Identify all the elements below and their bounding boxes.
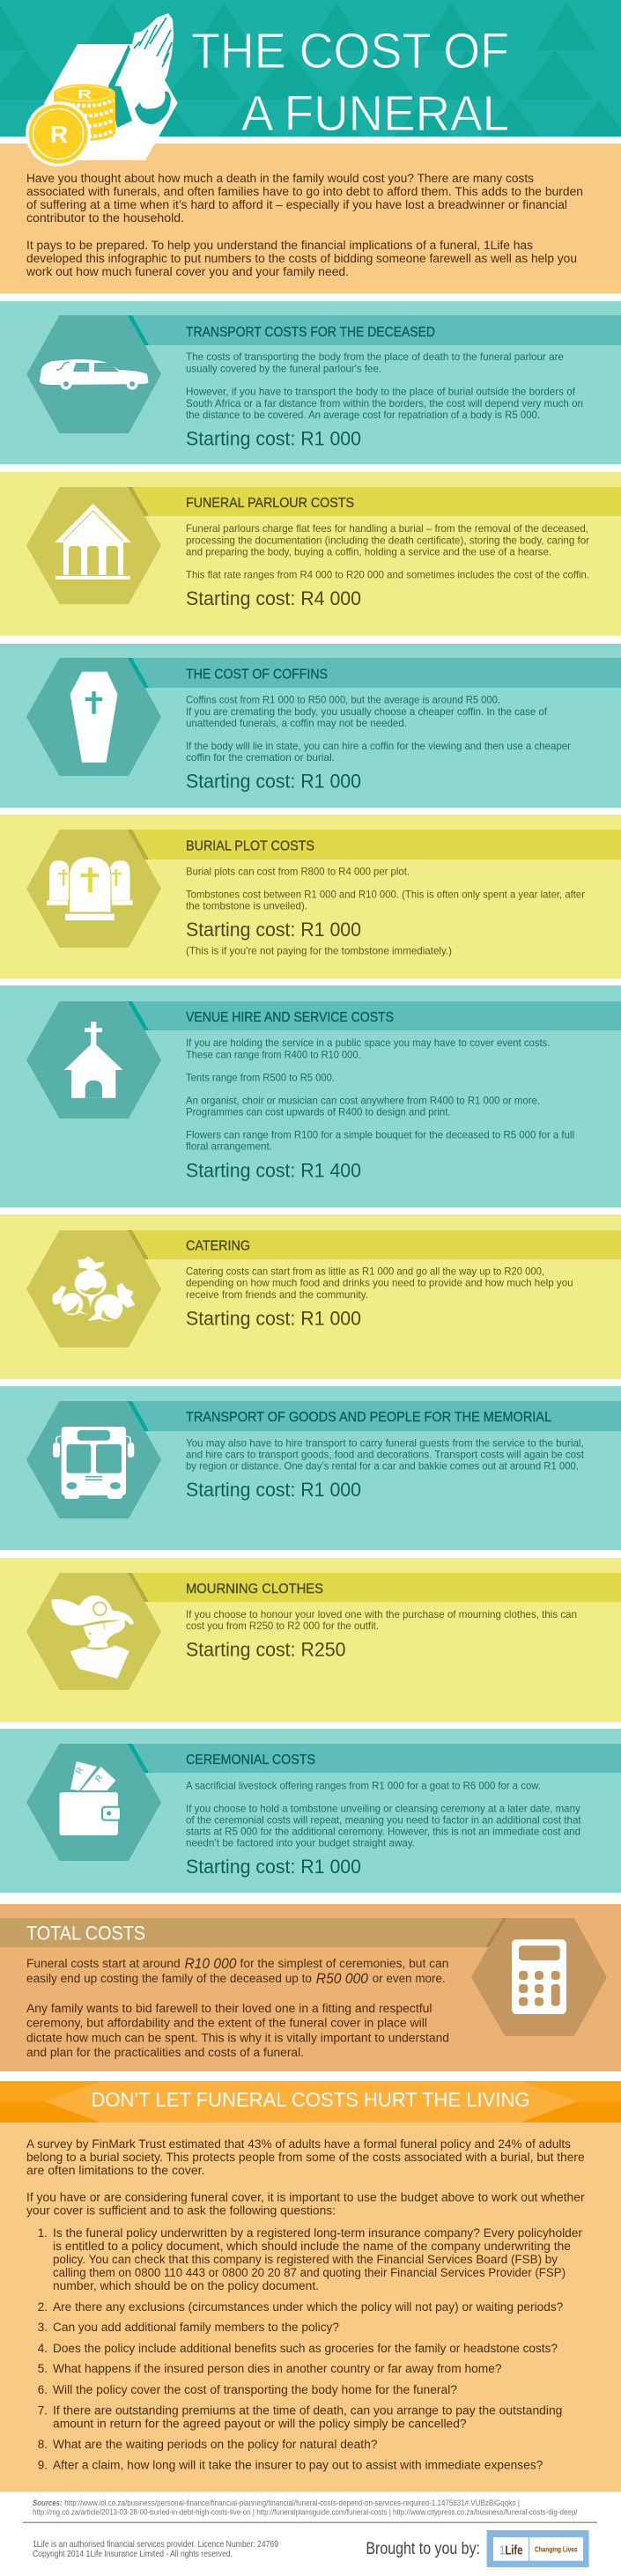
body text: starts at R5 000 for the additional ceremony. However, this is not an immediate cost and xyxy=(186,1826,580,1838)
body text: coffin for the cremation or burial. xyxy=(186,751,335,764)
heading: TRANSPORT OF GOODS AND PEOPLE FOR THE MEMORIAL xyxy=(186,1410,551,1425)
body text: receive from friends and the community. xyxy=(186,1288,368,1301)
body text xyxy=(186,694,571,764)
panel: mourning clothes xyxy=(0,1558,621,1722)
body text: Programmes can cost upwards of R400 to design and print. xyxy=(186,1106,451,1118)
body text: However, if you have to transport the body to the place of burial outside the borders of xyxy=(186,386,576,398)
heading band xyxy=(132,1401,621,1431)
legal notice: 1Life is an authorised financial services provider. Licence Number: 24769 xyxy=(33,2539,278,2550)
numbered question list: Can you add additional family members to the policy? xyxy=(53,2321,339,2334)
heading: MOURNING CLOTHES xyxy=(186,1582,323,1597)
banner: don't let funeral costs hurt the living: DON’T LET FUNERAL COSTS HURT THE LIVING xyxy=(91,2088,530,2111)
numbered question list: 1. xyxy=(38,2226,48,2240)
starting cost: Starting cost: R1 000 xyxy=(186,1856,361,1878)
starting cost: Starting cost: R1 000 xyxy=(186,1308,361,1330)
banner: don't let funeral costs hurt the living xyxy=(0,2081,621,2122)
heading band xyxy=(132,487,621,516)
panel: total costs xyxy=(0,1904,621,2071)
icon: coin stack xyxy=(54,85,115,141)
intro paragraph two: work out how much funeral cover you and your family need. xyxy=(26,265,349,278)
heading band xyxy=(132,315,621,345)
icon: praying hands xyxy=(108,13,174,128)
hexagon xyxy=(26,658,161,776)
icon: tombstones xyxy=(47,857,133,920)
starting cost: Starting cost: R1 000 xyxy=(186,1479,361,1501)
body text: the tombstone is unveiled). xyxy=(186,900,307,912)
numbered question list: 7. xyxy=(38,2404,48,2417)
numbered question list: Is the funeral policy underwritten by a registered long-term insurance company? Every policyholder xyxy=(53,2226,583,2240)
body text xyxy=(186,1266,573,1301)
starting cost: Starting cost: R4 000 xyxy=(186,587,361,609)
icon: wallet with banknotes: R xyxy=(93,1773,106,1784)
icon: praying hands and coins xyxy=(26,13,178,166)
numbered question list: number, which should be on the policy document. xyxy=(53,2279,319,2292)
intro paragraph two: developed this infographic to put numbers to the costs of bidding someone farewell as well as help you xyxy=(26,252,577,265)
total costs paragraph two: dictate how much can be spent. This is why it is vitally important to understand xyxy=(26,2031,449,2045)
total costs paragraph one: Funeral costs start at around xyxy=(26,1957,181,1970)
heading band xyxy=(132,1573,621,1602)
body text: If the body will lie in state, you can hire a coffin for the viewing and then use a cheaper xyxy=(186,740,571,752)
panel: ceremonial costs xyxy=(0,1729,621,1893)
body text xyxy=(186,351,583,421)
body text: floral arrangement. xyxy=(186,1140,272,1153)
numbered question list: is entitled to a policy document, which should include the name of the company underwriting the xyxy=(53,2240,571,2253)
body text: If you are cremating the body, you usually choose a cheaper coffin. In the case of xyxy=(186,705,548,718)
heading: THE COST OF COFFINS xyxy=(186,668,328,682)
body text: An organist, choir or musician can cost anywhere from R400 to R1 000 or more. xyxy=(186,1094,540,1106)
body text: Funeral parlours charge flat fees for handling a burial – from the removal of the deceased, xyxy=(186,522,588,535)
numbered question list: 2. xyxy=(38,2300,48,2314)
body text: processing the documentation (including the death certificate), storing the body, caring for xyxy=(186,534,589,546)
icon: root vegetables xyxy=(52,1257,135,1321)
intro paragraph one: Have you thought about how much a death in the family would cost you? There are many costs xyxy=(26,172,534,185)
budget paragraph: If you have or are considering funeral cover, it is important to use the budget above to work out whether xyxy=(26,2191,585,2203)
numbered question list xyxy=(38,2226,583,2471)
panel: catering xyxy=(0,1214,621,1379)
numbered question list: amount in return for the agreed payout or will the policy simply be cancelled? xyxy=(53,2417,467,2431)
hexagon xyxy=(26,830,161,948)
starting cost: Starting cost: R1 000 xyxy=(186,428,361,450)
panel: the cost of coffins xyxy=(0,644,621,808)
heading: FUNERAL PARLOUR COSTS xyxy=(186,496,354,511)
starting cost: Starting cost: R1 000 xyxy=(186,919,361,941)
hexagon xyxy=(26,487,161,604)
brought to you by: Brought to you by: xyxy=(366,2540,480,2558)
total costs paragraph two: and plan for the practicalities and costs of a funeral. xyxy=(26,2046,304,2059)
total costs paragraph two: ceremony, but affordability and the extent of the funeral cover in place will xyxy=(26,2017,427,2029)
panel: funeral parlour costs xyxy=(0,472,621,636)
body text: The costs of transporting the body from the place of death to the funeral parlour are xyxy=(186,351,564,363)
logo: 1Life: Changing Lives xyxy=(535,2545,578,2554)
survey paragraph: A survey by FinMark Trust estimated that 43% of adults have a formal funeral policy and 24% of adults xyxy=(26,2137,571,2151)
icon: large coin xyxy=(26,101,91,166)
body text: Tombstones cost between R1 000 and R10 000. (This is often only spent a year later, after xyxy=(186,889,585,901)
body text xyxy=(186,1608,577,1632)
numbered question list: 9. xyxy=(38,2459,48,2471)
intro paragraph one: associated with funerals, and often families have to go into debt to afford them. This adds to the burden xyxy=(26,185,583,198)
heading band xyxy=(132,1744,621,1773)
logo: 1Life xyxy=(487,2530,589,2567)
body text: unattended funerals, a coffin may not be needed. xyxy=(186,717,407,729)
body text: Coffins cost from R1 000 to R50 000, but the average is around R5 000. xyxy=(186,694,500,706)
icon: hearse xyxy=(40,359,149,389)
sources xyxy=(33,2498,578,2517)
heading: CATERING xyxy=(186,1238,250,1254)
numbered question list: After a claim, how long will it take the insurer to pay out to assist with immediate expenses? xyxy=(53,2459,543,2471)
heading band xyxy=(132,1230,621,1259)
title: THE COST OF xyxy=(191,23,509,79)
total costs paragraph one: R10 000 xyxy=(185,1955,237,1972)
icon: church xyxy=(64,1022,122,1098)
heading band xyxy=(0,1918,503,1947)
body text xyxy=(186,1037,574,1153)
body text xyxy=(186,1436,585,1473)
heading band xyxy=(132,1001,621,1030)
total costs paragraph one xyxy=(26,1955,448,1987)
hexagon xyxy=(26,1573,161,1690)
starting cost: Starting cost: R250 xyxy=(186,1639,345,1661)
panel: burial plot costs xyxy=(0,815,621,978)
hexagon xyxy=(26,1744,161,1861)
body text: and preparing the body, buying a coffin, holding a service and the use of a hearse. xyxy=(186,545,551,557)
numbered question list: 8. xyxy=(38,2438,48,2451)
sources: http://www.iol.co.za/business/personal-finance/financial-planning/financial/funeral-costs-depend-on-services-required-1.1475631#.VUBzBiGqqko | xyxy=(64,2498,520,2507)
note: (This is if you're not paying for the tombstone immediately.) xyxy=(186,944,452,956)
heading: VENUE HIRE AND SERVICE COSTS xyxy=(186,1010,394,1025)
panel: funeral cover advice xyxy=(0,2122,621,2491)
numbered question list: Are there any exclusions (circumstances under which the policy will not pay) or waiting periods? xyxy=(53,2300,563,2314)
body text xyxy=(186,865,585,912)
body text: If you choose to honour your loved one with the purchase of mourning clothes, this can xyxy=(186,1608,577,1620)
body text: the distance to be covered. An average cost for repatriation of a body is R5 000. xyxy=(186,409,540,421)
numbered question list: Will the policy cover the cost of transporting the body home for the funeral? xyxy=(53,2383,457,2396)
survey paragraph xyxy=(26,2137,585,2177)
starting cost: Starting cost: R1 400 xyxy=(186,1159,361,1181)
hexagon xyxy=(26,1401,161,1518)
heading: TRANSPORT COSTS FOR THE DECEASED xyxy=(186,325,435,340)
title: A FUNERAL xyxy=(241,85,509,142)
panel: venue hire and service costs xyxy=(0,985,621,1207)
starting cost: Starting cost: R1 000 xyxy=(186,771,361,793)
survey paragraph: belong to a burial society. This protects people from some of the costs associated with a burial, but there xyxy=(26,2151,585,2164)
icon: woman in mourning hat xyxy=(51,1595,134,1679)
header banner xyxy=(0,0,621,137)
total costs paragraph two xyxy=(26,2002,449,2059)
intro paragraph one xyxy=(26,172,583,225)
intro paragraph one: of suffering at a time when it’s hard to afford it – especially if you have lost a breadwinner or financial xyxy=(26,198,567,211)
heading band xyxy=(132,830,621,860)
body text: Burial plots can cost from R800 to R4 000 per plot. xyxy=(186,865,410,877)
body text: South Africa or a far distance from within the borders, the cost will depend very much on xyxy=(186,397,583,410)
sources: Sources: xyxy=(33,2498,63,2507)
body text: cost you from R250 to R2 000 for the outfit. xyxy=(186,1620,379,1632)
body text: by region or distance. One day’s rental for a car and bakkie comes out at around R1 000. xyxy=(186,1460,579,1473)
numbered question list: calling them on 0800 110 443 or 0800 20 20 87 and quoting their Financial Services Provider (FSP) xyxy=(53,2266,566,2279)
legal notice xyxy=(33,2539,278,2559)
icon: wallet with banknotes xyxy=(60,1761,121,1835)
icon: large coin: R xyxy=(50,121,68,148)
body text: This flat rate ranges from R4 000 to R20 000 and sometimes includes the cost of the coffin. xyxy=(186,568,589,580)
title xyxy=(191,23,509,142)
total costs paragraph one: R50 000 xyxy=(316,1970,368,1987)
body text: Tents range from R500 to R5 000. xyxy=(186,1071,335,1083)
heading: CEREMONIAL COSTS xyxy=(186,1753,315,1768)
body text: depending on how much food and drinks you need to provide and how much help you xyxy=(186,1277,573,1289)
panel: transport costs for the deceased xyxy=(0,301,621,464)
hexagon xyxy=(471,1918,607,2036)
body text: of the ceremonial costs will repeat, meaning you need to factor in an additional cost that xyxy=(186,1813,581,1826)
body text: usually covered by the funeral parlour's fee. xyxy=(186,363,381,375)
hexagon xyxy=(26,1001,161,1118)
body text: Flowers can range from R100 for a simple bouquet for the deceased to R5 000 for a full xyxy=(186,1129,574,1141)
numbered question list: What are the waiting periods on the policy for natural death? xyxy=(53,2438,377,2451)
legal notice: Copyright 2014 1Life Insurance Limited - All rights reserved. xyxy=(33,2549,233,2559)
body text xyxy=(186,522,589,580)
body text: These can range from R400 to R10 000. xyxy=(186,1048,361,1060)
hexagon xyxy=(26,1230,161,1347)
heading: BURIAL PLOT COSTS xyxy=(186,838,314,854)
budget paragraph xyxy=(26,2191,585,2218)
body text: A sacrificial livestock offering ranges from R1 000 for a goat to R6 000 for a cow. xyxy=(186,1779,541,1791)
body text: If you are holding the service in a public space you may have to cover event costs. xyxy=(186,1037,550,1049)
body text: and hire cars to transport goods, food and decorations. Transport costs will again be cost xyxy=(186,1448,585,1460)
logo: 1Life: 1Life xyxy=(499,2543,523,2558)
panel: transport of goods and people for the memorial xyxy=(0,1386,621,1550)
numbered question list: 5. xyxy=(38,2362,48,2375)
intro panel xyxy=(0,144,621,293)
intro paragraph two xyxy=(26,239,577,278)
survey paragraph: are often limitations to the cover. xyxy=(26,2164,204,2177)
numbered question list: If there are outstanding premiums at the time of death, can you arrange to pay the outstanding xyxy=(53,2404,562,2417)
numbered question list: 3. xyxy=(38,2321,48,2334)
numbered question list: Does the policy include additional benefits such as groceries for the family or headstone costs? xyxy=(53,2342,558,2355)
hexagon xyxy=(26,315,161,433)
heading band xyxy=(132,658,621,688)
icon: coin stack: R xyxy=(78,87,92,102)
body text: needn’t be factored into your budget straight away. xyxy=(186,1837,415,1849)
body text xyxy=(186,1779,581,1849)
heading: TOTAL COSTS xyxy=(26,1923,145,1945)
total costs paragraph one: easily end up costing the family of the deceased up to xyxy=(26,1972,312,1985)
icon: coffin xyxy=(70,672,118,763)
intro paragraph one: contributor to the household. xyxy=(26,211,184,225)
budget paragraph: your cover is sufficient and to ask the following questions: xyxy=(26,2203,336,2218)
icon: bus xyxy=(53,1427,134,1499)
numbered question list: What happens if the insured person dies in another country or far away from home? xyxy=(53,2362,502,2375)
intro paragraph two: It pays to be prepared. To help you understand the financial implications of a funeral, 1Life has xyxy=(26,239,533,252)
body text: Catering costs can start from as little as R1 000 and go all the way up to R20 000, xyxy=(186,1266,544,1278)
numbered question list: 4. xyxy=(38,2342,48,2355)
icon: funeral parlour building xyxy=(55,504,131,579)
total costs paragraph one: or even more. xyxy=(373,1972,446,1985)
total costs paragraph two: Any family wants to bid farewell to their loved one in a fitting and respectful xyxy=(26,2002,432,2015)
numbered question list: policy. You can check that this company is registered with the Financial Services Board (FSB) by xyxy=(53,2253,558,2266)
numbered question list: 6. xyxy=(38,2383,48,2396)
icon: calculator xyxy=(512,1939,566,2014)
total costs paragraph one: for the simplest of ceremonies, but can xyxy=(240,1957,448,1970)
body text: You may also have to hire transport to carry funeral guests from the service to the burial, xyxy=(186,1436,584,1449)
icon: wallet with banknotes: R xyxy=(74,1766,85,1776)
body text: If you choose to hold a tombstone unveiling or cleansing ceremony at a later date, many xyxy=(186,1802,580,1814)
